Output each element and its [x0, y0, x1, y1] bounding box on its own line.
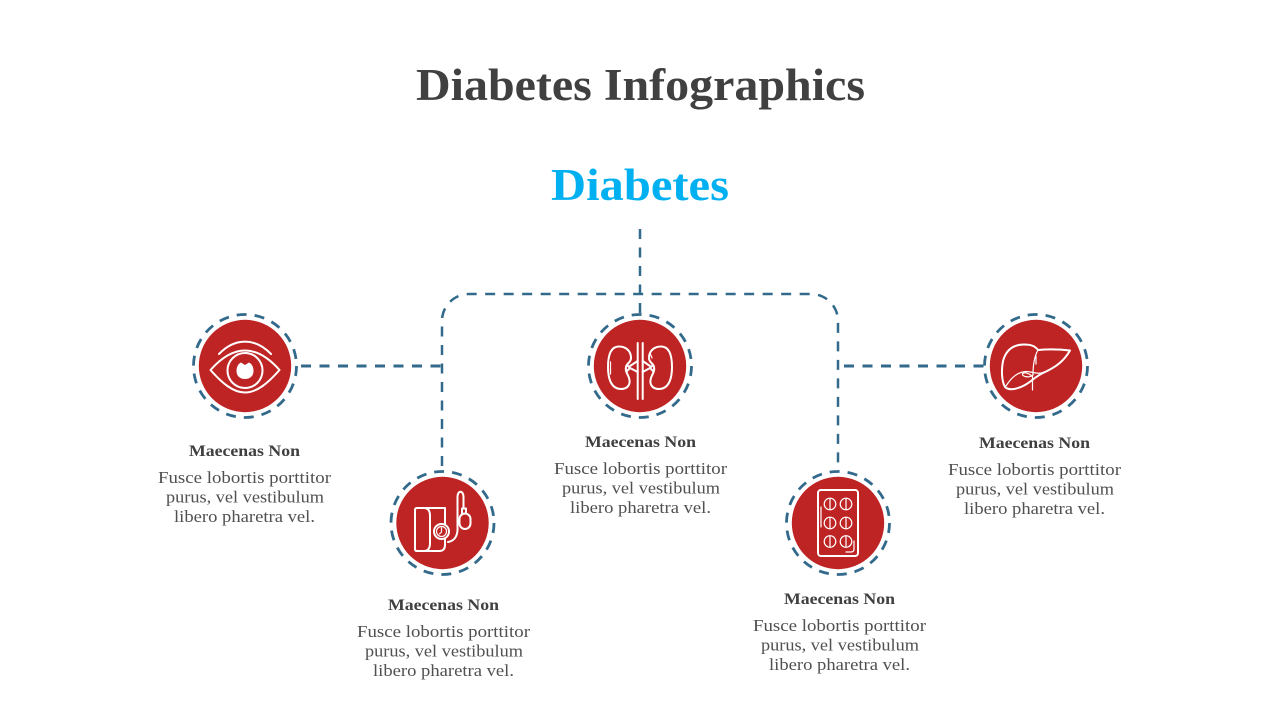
- node: liver: [984, 314, 1088, 418]
- caption: pills: [753, 591, 926, 674]
- caption: blood pressure: purus, vel vestibulum: [365, 642, 523, 660]
- caption: liver: [948, 435, 1121, 518]
- caption: kidneys: purus, vel vestibulum: [562, 478, 720, 498]
- caption: eye: Maecenas Non: [189, 443, 300, 460]
- connector lines: [301, 229, 984, 466]
- caption: kidneys: Fusce lobortis porttitor: [554, 459, 727, 478]
- caption: pills: Maecenas Non: [784, 591, 895, 608]
- caption: liver: libero pharetra vel.: [964, 499, 1105, 518]
- caption: kidneys: [554, 434, 727, 517]
- caption: eye: [158, 443, 331, 526]
- icon: pill blister pack: [818, 490, 858, 556]
- caption: blood pressure: Maecenas Non: [388, 597, 499, 614]
- caption: pills: Fusce lobortis porttitor: [753, 616, 926, 635]
- icon: blood pressure cuff: [415, 492, 470, 551]
- caption: liver: purus, vel vestibulum: [956, 480, 1114, 498]
- caption: kidneys: libero pharetra vel.: [570, 498, 711, 517]
- node: kidneys: [588, 314, 692, 418]
- caption: pills: libero pharetra vel.: [769, 655, 910, 674]
- caption: blood pressure: Fusce lobortis porttitor: [357, 622, 530, 641]
- title: Diabetes Infographics: [416, 60, 865, 110]
- caption: liver: Maecenas Non: [979, 435, 1090, 452]
- caption: eye: libero pharetra vel.: [174, 507, 315, 526]
- node: blood pressure monitor: [391, 472, 494, 574]
- icon: eye: [210, 342, 280, 392]
- caption: liver: Fusce lobortis porttitor: [948, 460, 1121, 479]
- caption: kidneys: Maecenas Non: [585, 434, 696, 451]
- central heading: Diabetes: [551, 159, 729, 210]
- caption: blood pressure: [357, 597, 530, 680]
- caption: blood pressure: libero pharetra vel.: [373, 661, 514, 680]
- icon: kidneys: [608, 343, 672, 399]
- caption: eye: purus, vel vestibulum: [166, 488, 324, 506]
- caption: eye: Fusce lobortis porttitor: [158, 468, 331, 487]
- node: eye: [194, 314, 296, 418]
- caption: pills: purus, vel vestibulum: [761, 636, 919, 654]
- node: pills: [786, 472, 890, 574]
- icon: liver: [1002, 344, 1070, 390]
